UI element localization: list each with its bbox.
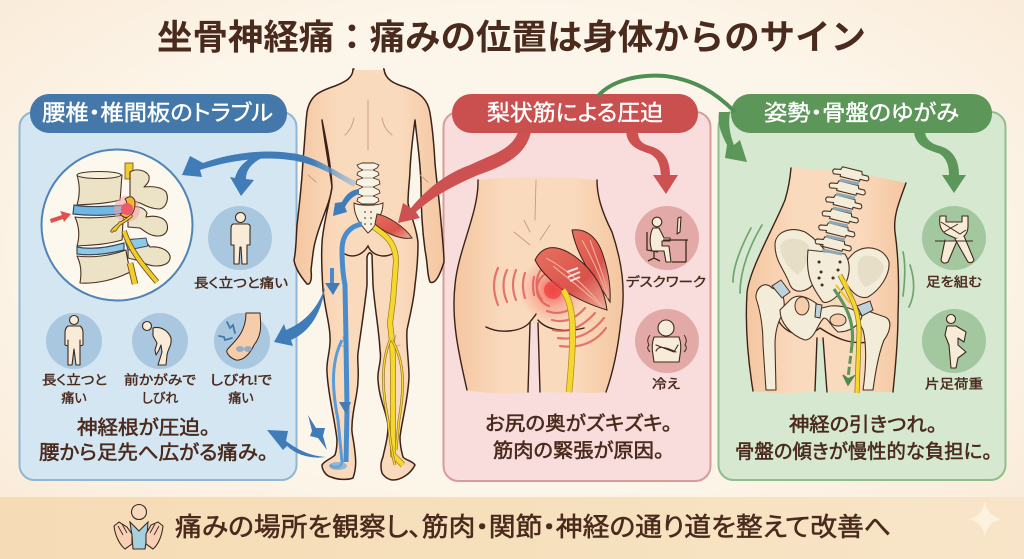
summary text: lumbar [39,417,268,464]
arrow: piriformis to body [398,132,531,223]
item: bending forward [124,313,197,406]
heading: lumbar and disc: 腰椎・椎間板のトラブル [42,100,273,126]
title: 坐骨神経痛：痛みの位置は身体からのサイン [157,18,866,58]
arrow: green arc to panel [598,76,747,162]
arrow: to standing icon [230,154,264,196]
arrow: green to icons [914,132,966,193]
summary text: lumbar: 腰から足先へ広がる痛み。 [39,442,268,464]
icon: desk work [626,206,706,290]
heading: piriformis: 梨状筋による圧迫 [487,100,663,126]
icon: crossed legs [922,206,986,290]
icon: standing person [208,206,272,270]
summary text: posture: 骨盤の傾きが慢性的な負担に。 [735,441,992,463]
summary text: piriformis: 筋肉の緊張が原因。 [493,440,664,462]
arrow: to disc inset [182,151,356,187]
icon: crossed legs: 足を組む [926,274,982,290]
summary text: lumbar: 神経根が圧迫。 [77,417,210,439]
item: numb foot: しびれ!で [210,372,273,388]
item: numb foot: 痛い [228,390,254,406]
illustration: pelvis and spine [733,165,914,393]
summary text: posture: 神経の引きつれ。 [789,414,937,436]
lumbar spine on body [354,163,383,233]
panel: posture and pelvic tilt [718,94,1006,480]
icon: desk work: デスクワーク [626,274,706,290]
heading: lumbar and disc [30,94,287,133]
panel: piriformis compression [444,94,710,481]
illustration: buttocks with piriformis [453,177,623,394]
icon: caring hands [114,504,163,549]
summary text: posture [735,414,992,463]
summary text: piriformis [485,413,672,462]
label: standing pain: 長く立つと痛い [194,276,288,290]
icon: sparkle [968,501,1002,537]
icon: weight on one leg [922,309,986,392]
arrow: small foot arrow [308,415,327,450]
heading: posture and pelvis [731,94,992,133]
item: bending forward: 前かがみで [124,372,197,388]
panel: lumbar and disc trouble [20,94,296,480]
icon: cold: 冷え [652,376,680,392]
inset: herniated disc illustration [42,150,192,300]
item: long standing: 痛い [61,390,87,406]
item: long standing [42,313,107,406]
heading: posture and pelvis: 姿勢・骨盤のゆがみ [764,100,959,126]
item: long standing: 長く立つと [42,372,107,388]
arrow: to summary text [267,430,326,458]
arrow: to numb foot [274,287,325,346]
icon: cold [635,309,699,392]
icon: weight on one leg: 片足荷重 [925,376,983,392]
central back-view body figure [294,66,444,480]
bottom banner [0,497,1024,559]
piriformis muscle on body [375,214,412,238]
banner message: 痛みの場所を観察し、筋肉・関節・神経の通り道を整えて改善へ [175,512,891,542]
arrow: spine to hip [333,189,359,216]
summary text: piriformis: お尻の奥がズキズキ。 [485,413,672,435]
heading: piriformis [452,94,698,133]
blue pain pathway left leg [325,224,362,470]
item: numb foot [210,313,273,406]
arrow: piriformis to icons [626,132,678,194]
item: bending forward: しびれ [142,390,178,406]
sciatic nerve: yellow right leg [374,227,403,465]
